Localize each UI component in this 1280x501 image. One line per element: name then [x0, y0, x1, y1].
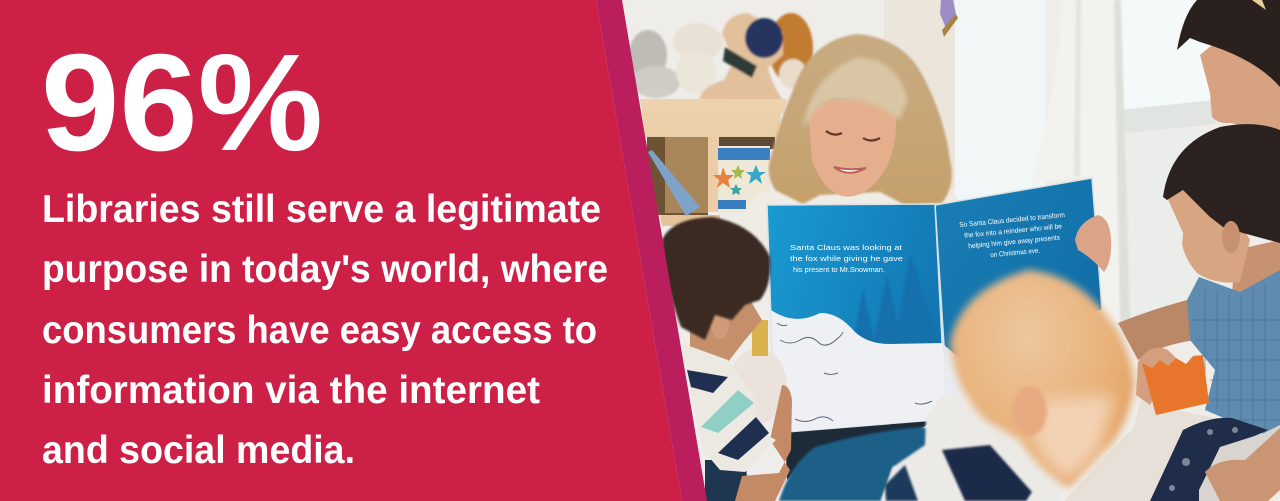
- book text left: [790, 245, 903, 274]
- teacher hand: [1075, 215, 1111, 272]
- book text right: the fox into a reindeer who will be: [964, 223, 1062, 240]
- book text left: the fox while giving he gave: [790, 256, 903, 263]
- hand lower right: [1205, 428, 1280, 501]
- child hair: [1163, 124, 1280, 243]
- body text: Libraries still serve a legitimate: [42, 188, 601, 231]
- body text: information via the internet: [42, 369, 540, 412]
- grey knee: [1199, 425, 1280, 501]
- book text right: [959, 212, 1068, 262]
- leaning book: [648, 150, 700, 216]
- stuffed toys on shelf: [629, 13, 813, 103]
- neck: [1232, 240, 1280, 295]
- white trousers: [1064, 400, 1225, 501]
- hair fringe: [803, 58, 908, 128]
- denim dungaree: [779, 427, 991, 501]
- curly hair: [662, 217, 770, 340]
- book right page: [935, 178, 1102, 376]
- trees on page: [853, 253, 938, 345]
- book text right: helping him give away presents: [968, 235, 1061, 250]
- baby ear: [1013, 386, 1047, 436]
- striped shirt: [881, 393, 1065, 501]
- body text: [42, 188, 608, 472]
- wooden shelf: [640, 99, 787, 226]
- left child: [662, 217, 792, 501]
- baby head: [950, 270, 1134, 487]
- dark lap under book: [785, 415, 945, 480]
- adult arm: [1118, 300, 1195, 360]
- book text right: So Santa Claus decided to transform: [959, 212, 1065, 229]
- classroom wall background: [600, 0, 1280, 501]
- open picture book: [767, 178, 1102, 433]
- face: [808, 99, 896, 197]
- teddy pillow: [729, 348, 787, 424]
- orange toy cup: [1142, 355, 1209, 415]
- hair back: [769, 34, 952, 205]
- front baby, blurred: [779, 270, 1134, 501]
- book text right: on Christmas eve.: [990, 248, 1041, 259]
- toy box with stars: [713, 146, 770, 213]
- body text: and social media.: [42, 429, 355, 472]
- magenta accent stripe: [596, 0, 707, 501]
- white blouse: [733, 188, 975, 280]
- book left page: [767, 204, 946, 433]
- book text left: Santa Claus was looking at: [790, 245, 902, 252]
- wall ornament: [940, 0, 958, 37]
- baby face: [1030, 395, 1115, 482]
- body text: consumers have easy access to: [42, 309, 597, 352]
- hair clip: [1252, 0, 1266, 10]
- striped shirt: [681, 343, 776, 472]
- colourful toys behind: [752, 320, 768, 356]
- book text left: his present to Mr.Snowman.: [793, 267, 885, 274]
- child ear: [1222, 221, 1240, 253]
- eyes and smile: [826, 131, 880, 173]
- skin neck: [690, 300, 762, 362]
- adult woman right: [1118, 0, 1280, 360]
- headline statistic: 96%: [41, 26, 323, 180]
- child face: [1167, 188, 1250, 283]
- window: [1118, 0, 1218, 134]
- red text panel: [0, 0, 682, 501]
- adult face: [1200, 30, 1280, 133]
- checked shirt: [1187, 270, 1280, 440]
- ear: [711, 311, 729, 339]
- right child: [1064, 124, 1280, 501]
- photo: teacher reading to children: [600, 0, 1280, 501]
- adult hair: [1177, 0, 1280, 87]
- spill of white page: [944, 345, 966, 405]
- snow: [771, 310, 946, 433]
- child hand: [1136, 348, 1178, 405]
- arm: [735, 385, 792, 501]
- patterned leggings: [1150, 418, 1268, 501]
- snow squiggles: [777, 323, 932, 422]
- body text: purpose in today's world, where: [42, 248, 608, 291]
- floor clothes: [705, 460, 750, 501]
- teacher: [733, 34, 975, 280]
- curtain: [1032, 0, 1130, 322]
